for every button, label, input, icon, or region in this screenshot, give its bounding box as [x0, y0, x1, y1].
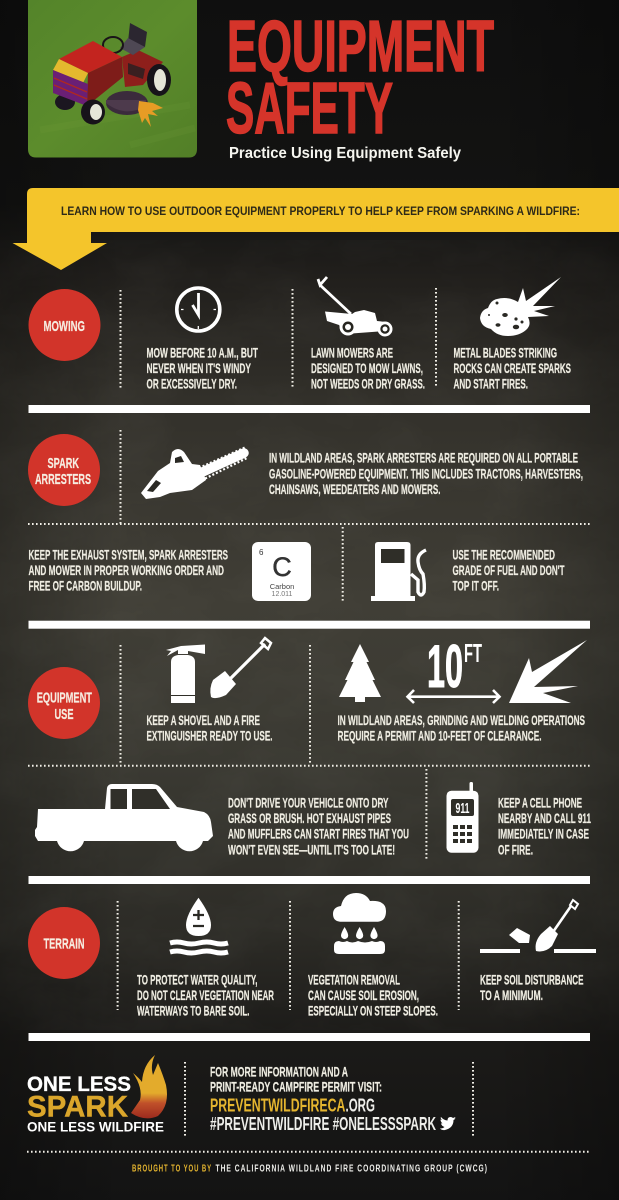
credit line: BROUGHT TO YOU BY	[132, 1164, 212, 1175]
text: keep a shovel: EXTINGUISHER READY TO USE.	[146, 728, 272, 744]
text: spark arrester requirement: CHAINSAWS, WEEDEATERS AND MOWERS.	[269, 481, 440, 497]
icon: welding spark	[509, 640, 587, 703]
section: equipment use	[28, 633, 587, 765]
icon: carbon element tile: 6	[259, 548, 264, 557]
logo: one less spark	[27, 1055, 167, 1135]
text: keep a shovel	[146, 712, 272, 744]
text: lawn mowers	[311, 344, 425, 392]
text: spark arrester requirement	[269, 450, 583, 497]
website link: .ORG	[346, 1096, 375, 1116]
logo: one less spark: ONE LESS	[27, 1073, 131, 1096]
text: metal blades	[454, 344, 571, 392]
yellow banner arrow	[12, 188, 619, 270]
website link: PREVENTWILDFIRECA	[210, 1096, 345, 1116]
section: mowing	[28, 277, 571, 392]
icon: cell phone	[446, 782, 478, 853]
icon: carbon element tile: Carbon	[270, 582, 294, 591]
text: don't drive: GRASS OR BRUSH. HOT EXHAUST PIPES	[228, 810, 391, 826]
icon: shovel	[210, 638, 271, 698]
text: lawn mowers: LAWN MOWERS ARE	[311, 344, 393, 360]
text: water quality: DO NOT CLEAR VEGETATION NEAR	[137, 987, 274, 1003]
text: exhaust system: AND MOWER IN PROPER WORKING ORDER AND	[28, 562, 224, 578]
text: water quality: TO PROTECT WATER QUALITY,	[137, 971, 258, 987]
badge: spark arresters	[28, 434, 100, 506]
text: cell phone	[498, 794, 591, 857]
icon: lawn mower	[318, 277, 392, 336]
icon: chainsaw	[141, 447, 247, 499]
icon: flame	[131, 1055, 167, 1118]
badge: spark arresters: SPARK	[48, 455, 79, 472]
credit line	[132, 1164, 488, 1175]
text: exhaust system	[28, 546, 228, 594]
text: grinding and welding	[338, 712, 585, 744]
text: water quality	[137, 971, 274, 1018]
text: don't drive: AND MUFFLERS CAN START FIRES THAT YOU	[228, 826, 409, 842]
icon: rain cloud and soil	[333, 893, 386, 954]
subtitle: Practice Using Equipment Safely	[229, 145, 461, 162]
text: recommended fuel: TOP IT OFF.	[452, 578, 499, 594]
badge: equipment use	[28, 667, 100, 739]
text: vegetation removal: CAN CAUSE SOIL EROSION,	[308, 987, 419, 1003]
text: mow before 10: OR EXCESSIVELY DRY.	[146, 376, 237, 392]
text: water quality: WATERWAYS TO BARE SOIL.	[137, 1002, 250, 1018]
badge: terrain	[28, 907, 100, 979]
logo: one less spark: SPARK	[27, 1091, 128, 1124]
icon: shovel digging soil	[480, 900, 596, 953]
icon: pickup truck	[35, 784, 213, 851]
text: more information	[210, 1064, 382, 1095]
text: vegetation removal	[308, 971, 438, 1018]
text: vegetation removal: ESPECIALLY ON STEEP SLOPES.	[308, 1002, 438, 1018]
section: terrain	[28, 893, 596, 1018]
icon: carbon element tile	[252, 542, 311, 601]
icon: cell phone: 911	[456, 800, 470, 817]
text: exhaust system: FREE OF CARBON BUILDUP.	[28, 578, 142, 594]
label: ten feet: FT	[464, 638, 482, 668]
section: spark arresters	[28, 430, 583, 524]
logo: one less spark: ONE LESS WILDFIRE	[27, 1119, 164, 1135]
credit line: THE CALIFORNIA WILDLAND FIRE COORDINATING GROUP (CWCG)	[216, 1164, 488, 1175]
hashtags: #PREVENTWILDFIRE #ONELESSSPARK	[210, 1114, 436, 1134]
title	[226, 7, 494, 149]
text: don't drive: WON'T EVEN SEE—UNTIL IT'S TOO LATE!	[228, 841, 395, 857]
text: mow before 10: NEVER WHEN IT'S WINDY	[146, 360, 251, 376]
arrow: ten foot distance	[408, 690, 500, 703]
badge: equipment use: EQUIPMENT	[37, 690, 92, 707]
icon: gas pump	[371, 542, 426, 601]
text: mow before 10	[146, 344, 258, 392]
icon: rock and spark	[480, 277, 561, 336]
text: don't drive: DON'T DRIVE YOUR VEHICLE ONTO DRY	[228, 794, 389, 810]
title: SAFETY	[226, 69, 393, 149]
text: soil disturbance: TO A MINIMUM.	[480, 987, 543, 1003]
icon: water drop and waves	[170, 898, 228, 953]
text: exhaust system: KEEP THE EXHAUST SYSTEM, SPARK ARRESTERS	[28, 546, 228, 562]
text: soil disturbance	[480, 971, 584, 1003]
icon: pine tree	[339, 644, 381, 702]
text: mow before 10: MOW BEFORE 10 A.M., BUT	[146, 344, 258, 360]
text: more information: FOR MORE INFORMATION AND A	[210, 1064, 348, 1080]
badge: mowing: MOWING	[44, 318, 85, 335]
text: lawn mowers: NOT WEEDS OR DRY GRASS.	[311, 376, 425, 392]
badge: terrain: TERRAIN	[44, 936, 84, 953]
text: cell phone: OF FIRE.	[498, 841, 533, 857]
icon: carbon element tile: 12.011	[272, 591, 293, 598]
text: recommended fuel	[452, 546, 565, 594]
icon: twitter bird	[440, 1117, 456, 1130]
badge: spark arresters: ARRESTERS	[35, 471, 91, 488]
text: metal blades: AND START FIRES.	[454, 376, 528, 392]
text: more information: PRINT-READY CAMPFIRE PERMIT VISIT:	[210, 1079, 382, 1095]
panel: riding mower illustration	[28, 0, 197, 158]
badge: equipment use: USE	[54, 706, 74, 723]
icon: fire extinguisher	[166, 644, 205, 703]
text: vegetation removal: VEGETATION REMOVAL	[308, 971, 400, 987]
text: keep a shovel: KEEP A SHOVEL AND A FIRE	[146, 712, 260, 728]
icon: carbon element tile: C	[272, 552, 292, 582]
badge: mowing	[28, 289, 100, 361]
text: don't drive	[228, 794, 409, 857]
text: lawn mowers: DESIGNED TO MOW LAWNS,	[311, 360, 423, 376]
icon: clock	[177, 288, 220, 331]
label: ten feet: 10	[427, 633, 463, 700]
